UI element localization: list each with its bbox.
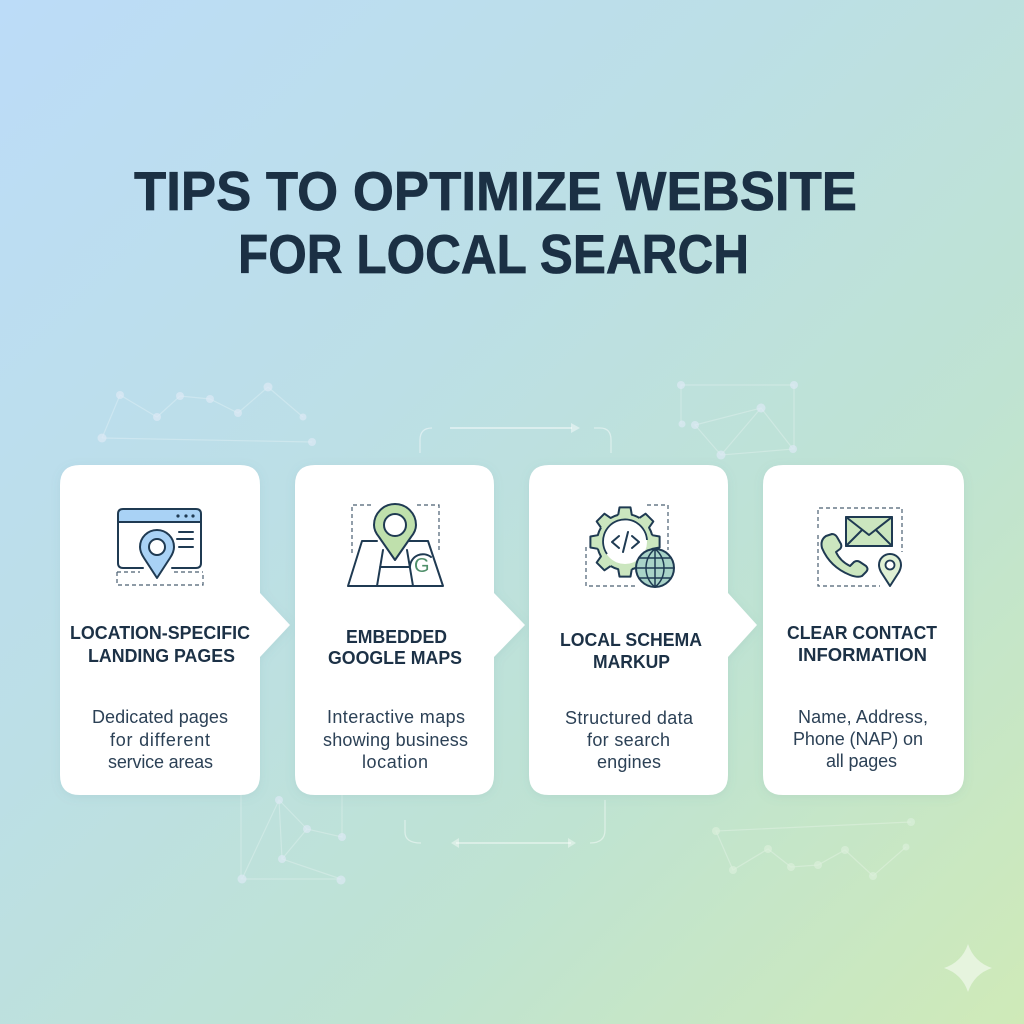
heading — [328, 627, 462, 668]
flow arrow: top — [420, 423, 611, 453]
description: Name, Address, — [798, 707, 928, 727]
description — [323, 707, 468, 772]
heading: LOCATION-SPECIFIC — [70, 623, 250, 643]
title — [134, 160, 857, 285]
decorative network: top left — [98, 382, 316, 446]
flow arrow: bottom — [405, 800, 605, 848]
description: engines — [597, 752, 661, 772]
description — [92, 707, 228, 772]
description: location — [362, 752, 428, 772]
description: showing business — [323, 730, 468, 750]
heading: INFORMATION — [798, 645, 927, 665]
description — [793, 707, 928, 771]
heading: CLEAR CONTACT — [787, 623, 937, 643]
description: Interactive maps — [327, 707, 465, 727]
description: Structured data — [565, 708, 694, 728]
decorative network: bottom right — [712, 818, 915, 880]
heading: GOOGLE MAPS — [328, 648, 462, 668]
description: Phone (NAP) on — [793, 729, 923, 749]
heading: MARKUP — [593, 652, 670, 672]
title: FOR LOCAL SEARCH — [238, 223, 749, 285]
heading — [787, 623, 937, 665]
icon: sparkle — [944, 944, 992, 992]
description — [565, 708, 694, 772]
heading — [70, 623, 250, 666]
panel: clear contact information — [763, 465, 964, 795]
panel: local schema markup — [529, 465, 757, 795]
icon: phone, envelope and pin — [818, 508, 902, 586]
heading: EMBEDDED — [346, 627, 447, 647]
heading: LOCAL SCHEMA — [560, 630, 702, 650]
description: service areas — [108, 752, 213, 772]
decorative network: top right — [677, 381, 798, 460]
panel: embedded google maps — [295, 465, 525, 795]
decorative network: bottom left — [238, 795, 346, 884]
icon: map with pin and G: G — [414, 555, 430, 577]
heading — [560, 630, 702, 672]
icon: map with pin and G — [348, 504, 443, 586]
description: Dedicated pages — [92, 707, 228, 727]
panel: location-specific landing pages — [60, 465, 290, 795]
heading: LANDING PAGES — [88, 646, 235, 666]
description: all pages — [826, 751, 897, 771]
icon: browser window with pin — [117, 509, 203, 585]
description: for different — [110, 730, 210, 750]
description: for search — [587, 730, 670, 750]
icon: gear, code and globe — [586, 505, 674, 587]
title: TIPS TO OPTIMIZE WEBSITE — [134, 160, 857, 222]
